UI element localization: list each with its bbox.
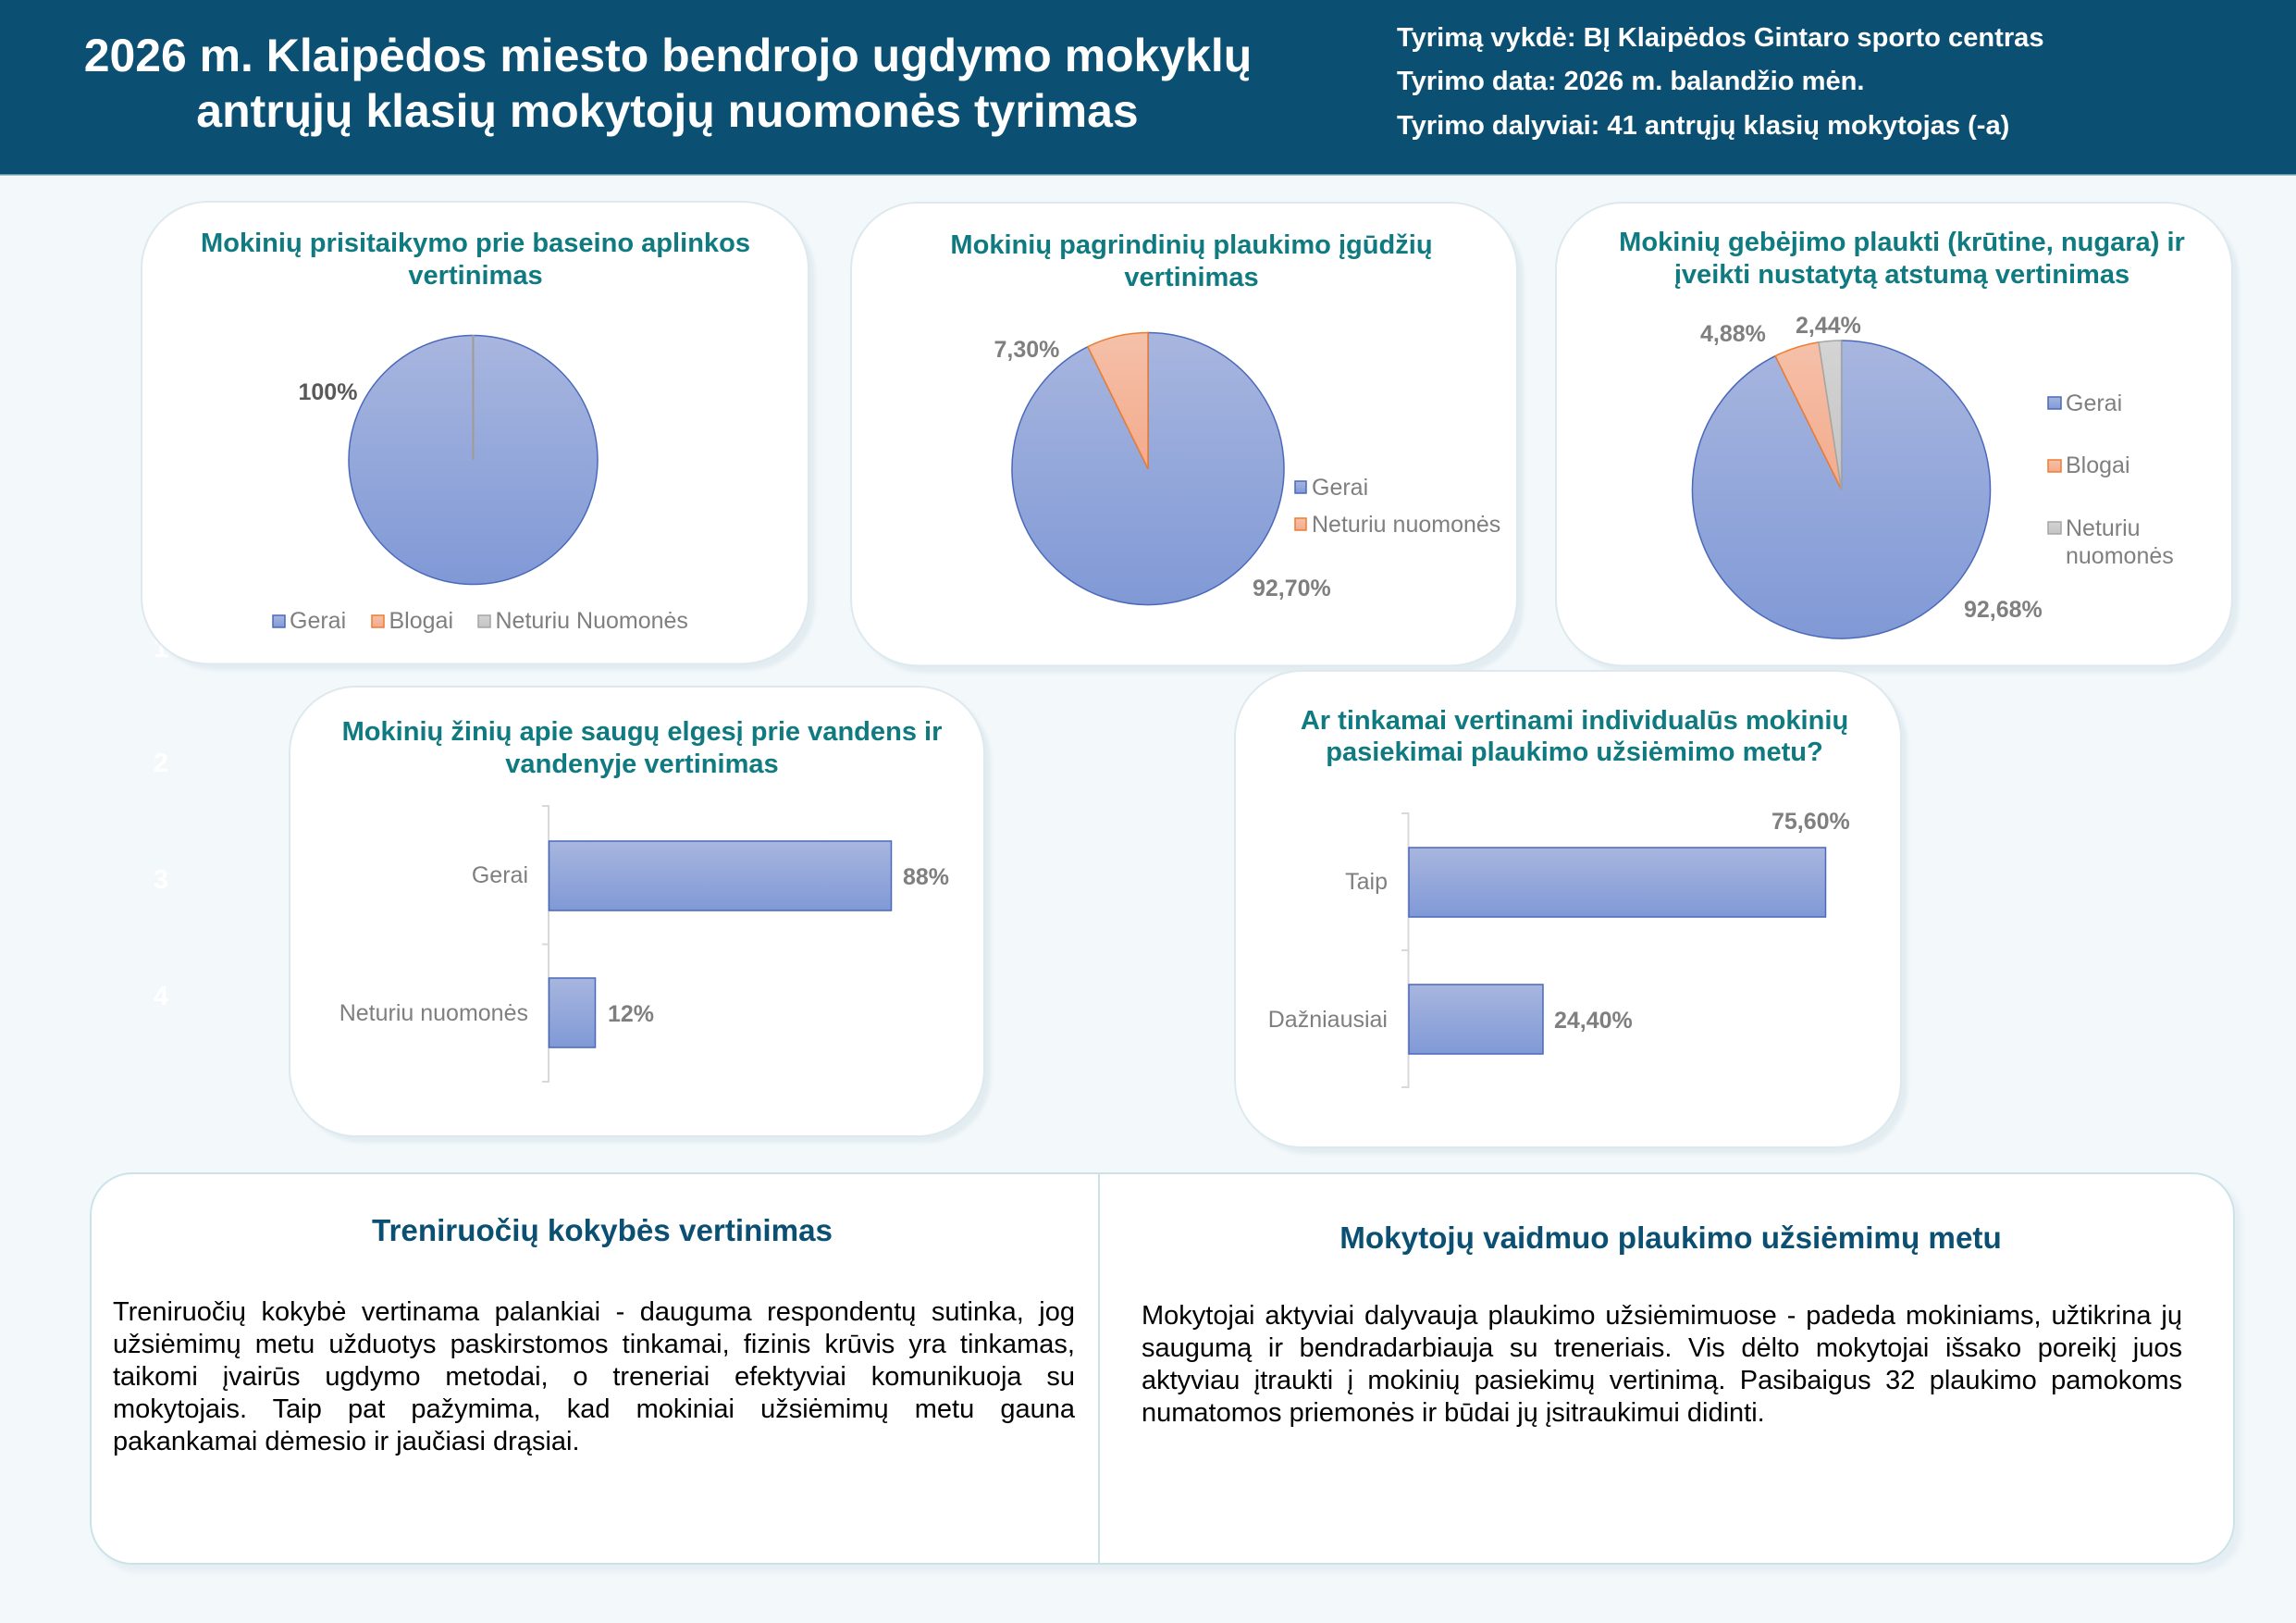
text block: training quality: taikomi įvairūs ugdymo metodai, o treneriai efektyviai komunikuoja su — [113, 1362, 1075, 1392]
text block: training quality: Treniruočių kokybė vertinama palankiai - dauguma respondentų sutinka, jog — [113, 1297, 1075, 1327]
legend: Blogai — [389, 608, 453, 634]
text block: training quality: užsiėmimų metu užduotys paskirstomos tinkamai, fizinis krūvis yra tinkamas, — [113, 1330, 1075, 1359]
heading — [1619, 228, 2185, 290]
data label: 92,70% — [1253, 576, 1331, 601]
heading: Mokinių prisitaikymo prie baseino aplinkos — [201, 229, 750, 258]
data label: 7,30% — [994, 337, 1059, 363]
faint step numbers: 1 — [154, 634, 168, 663]
data label: 4,88% — [1700, 321, 1766, 347]
text block: teacher role: aktyviau įtraukti į mokinių pasiekimų vertinimą. Pasibaigus 32 plaukimo pamokoms — [1142, 1366, 2182, 1395]
panel: summary text — [90, 1172, 2235, 1565]
bar chart: Dažniausiai — [1268, 1007, 1388, 1033]
text block: teacher role: Mokytojai aktyviai dalyvauja plaukimo užsiėmimuose - padeda mokiniams, užtikrina jų — [1142, 1301, 2182, 1331]
panel: pool environment pie — [142, 202, 815, 670]
legend: Neturiu — [2066, 515, 2141, 541]
pie chart — [349, 335, 598, 585]
legend — [2048, 390, 2174, 569]
heading: Mokinių žinių apie saugų elgesį prie vandens ir — [342, 717, 942, 747]
legend — [273, 608, 688, 634]
panel: swimming ability pie — [1556, 203, 2239, 673]
heading: vertinimas — [1124, 263, 1259, 292]
data label: 92,68% — [1964, 597, 2043, 623]
bar chart: 88% — [903, 864, 949, 890]
heading: vandenyje vertinimas — [505, 750, 779, 779]
heading: pasiekimai plaukimo užsiėmimo metu? — [1326, 737, 1823, 767]
heading: training quality: Treniruočių kokybės vertinimas — [372, 1214, 833, 1248]
heading: Ar tinkamai vertinami individualūs mokinių — [1301, 706, 1848, 736]
text block: training quality — [113, 1297, 1075, 1456]
text block: training quality: mokytojais. Taip pat pažymima, kad mokiniai užsiėmimų metu gauna — [113, 1394, 1075, 1424]
legend: Blogai — [2066, 452, 2129, 478]
study details: Tyrimo data: 2026 m. balandžio mėn. — [1397, 67, 1865, 96]
faint step numbers: 3 — [154, 865, 168, 895]
bar chart: 12% — [608, 1001, 654, 1027]
legend: Neturiu Nuomonės — [496, 608, 688, 634]
heading: Mokinių pagrindinių plaukimo įgūdžių — [950, 230, 1433, 260]
bar chart — [1268, 809, 1850, 1087]
heading: Mokinių gebėjimo plaukti (krūtine, nugara) ir — [1619, 228, 2185, 257]
text block: teacher role: numatomos priemonės ir būdai jų įsitraukimui didinti. — [1142, 1398, 1765, 1428]
legend: Gerai — [290, 608, 346, 634]
bar chart: Gerai — [472, 862, 528, 888]
text block: teacher role: saugumą ir bendradarbiauja su treneriais. Vis dėlto mokytojai išsako poreikį juos — [1142, 1333, 2182, 1363]
study details: Tyrimą vykdė: BĮ Klaipėdos Gintaro sporto centras — [1397, 23, 2044, 53]
heading: teacher role: Mokytojų vaidmuo plaukimo užsiėmimų metu — [1339, 1221, 2002, 1256]
legend: Neturiu nuomonės — [1312, 512, 1500, 538]
title: 2026 m. Klaipėdos miesto bendrojo ugdymo mokyklų — [84, 30, 1252, 81]
data label: 100% — [298, 379, 357, 405]
faint step numbers — [154, 634, 168, 1011]
study details — [1397, 23, 2044, 141]
text block: training quality: pakankamai dėmesio ir jaučiasi drąsiai. — [113, 1427, 580, 1456]
heading — [950, 230, 1433, 292]
bar chart: 75,60% — [1771, 809, 1850, 835]
study details: Tyrimo dalyviai: 41 antrųjų klasių mokytojas (-a) — [1397, 111, 2009, 141]
legend: Gerai — [2066, 390, 2122, 416]
title: antrųjų klasių mokytojų nuomonės tyrimas — [196, 85, 1139, 137]
legend — [1295, 475, 1500, 538]
header band — [0, 0, 2296, 176]
heading — [1301, 706, 1848, 767]
heading — [201, 229, 750, 291]
legend: Gerai — [1312, 475, 1368, 501]
pie chart — [1693, 341, 1991, 638]
panel: basic swimming skills pie — [851, 203, 1524, 673]
heading: vertinimas — [408, 261, 543, 291]
column divider line — [1098, 1173, 1100, 1565]
pie chart — [1012, 333, 1284, 605]
panel: safe behaviour bar chart — [290, 687, 991, 1143]
faint step numbers: 4 — [154, 982, 168, 1011]
text block: teacher role — [1142, 1301, 2182, 1428]
heading — [342, 717, 942, 779]
bar chart: 24,40% — [1554, 1008, 1633, 1034]
legend: nuomonės — [2066, 543, 2174, 569]
bar chart: Neturiu nuomonės — [339, 1000, 528, 1026]
data label: 2,44% — [1796, 313, 1861, 339]
title — [84, 30, 1252, 137]
faint step numbers: 2 — [154, 749, 168, 778]
panel: individual achievements bar chart — [1235, 671, 1907, 1154]
bar chart — [339, 806, 949, 1082]
heading: įveikti nustatytą atstumą vertinimas — [1674, 260, 2129, 290]
bar chart: Taip — [1345, 869, 1388, 895]
